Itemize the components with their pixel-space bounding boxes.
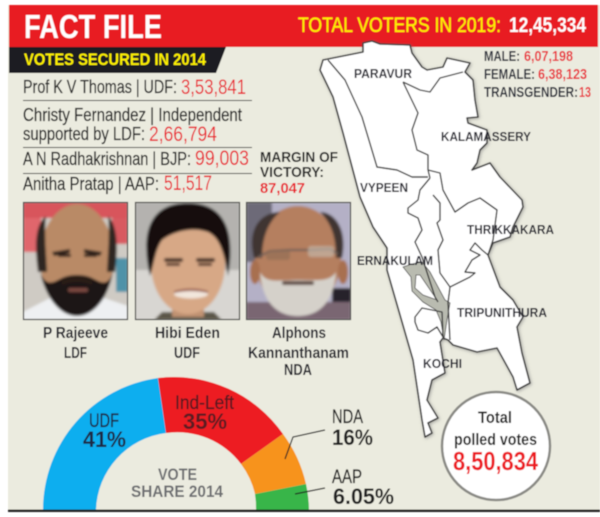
voter breakdown (484, 49, 591, 101)
candidate names: UDF (174, 345, 200, 362)
text block: votes secured list: Christy Fernandez | Independent (23, 105, 242, 125)
map: constituencies: KOCHI (423, 356, 462, 371)
candidate names: Hibi Eden (155, 325, 220, 342)
map outline (320, 41, 530, 437)
candidate names: LDF (64, 345, 87, 362)
voter breakdown: 6,38,123 (538, 67, 587, 83)
photo: Alphons Kannanthanam (246, 202, 351, 320)
leader: AAP (295, 488, 325, 494)
photo: Hibi Eden (135, 202, 240, 320)
callout: total polled votes: polled votes (454, 430, 537, 449)
text block: votes secured list: 2,66,794 (149, 122, 217, 146)
chart: vote share half donut (43, 377, 394, 510)
chart: vote share half donut: 41% (83, 427, 126, 452)
margin of victory: 87,047 (260, 180, 305, 197)
candidate names: Kannanthanam (248, 345, 349, 362)
chart: vote share half donut: 35% (183, 409, 227, 434)
backwater island (415, 275, 437, 300)
segment: NDA (241, 434, 306, 494)
total voters heading: TOTAL VOTERS IN 2019: (298, 13, 501, 37)
backwater (403, 262, 450, 340)
voter breakdown: FEMALE: (484, 67, 535, 83)
segment: Ind-Left (158, 377, 283, 464)
map labels: PARAVUR (354, 66, 413, 81)
map: constituencies: ERNAKULAM (357, 253, 433, 268)
text block: votes secured list: A N Radhakrishnan | BJP: (23, 149, 191, 169)
leader: NDA (285, 430, 325, 459)
bottom rule (8, 510, 600, 512)
map: constituencies: THRIKKAKARA (467, 222, 555, 237)
voter breakdown: 13 (579, 85, 591, 101)
text block: votes secured list: 99,003 (195, 146, 249, 170)
callout: total polled votes: Total (478, 408, 512, 427)
map: constituencies (320, 41, 555, 437)
voter breakdown: TRANSGENDER: (484, 85, 578, 101)
label: NDA: NDA (332, 407, 363, 428)
map: constituencies: VYPEEN (360, 180, 408, 195)
photo: P Rajeeve (23, 202, 128, 320)
chart: vote share half donut: SHARE 2014 (131, 482, 223, 501)
voter breakdown: 6,07,198 (524, 49, 573, 65)
candidate names: P Rajeeve (43, 325, 108, 342)
text block: votes secured list: 51,517 (164, 171, 212, 195)
candidate names: NDA (284, 362, 312, 379)
label: Ind-Left: Ind-Left (175, 393, 235, 414)
constituency boundaries (328, 60, 497, 340)
callout: total polled votes (442, 392, 550, 500)
text block: votes secured list (23, 75, 252, 195)
voter breakdown: MALE: (484, 49, 520, 65)
callout: total polled votes: 8,50,834 (453, 446, 538, 476)
text block: votes secured list: Anitha Pratap | AAP: (23, 174, 159, 194)
map: constituencies: TRIPUNITHURA (457, 305, 548, 320)
header band (9, 5, 598, 47)
candidate names (43, 325, 349, 379)
photo frame (136, 202, 240, 320)
total voters number: 12,45,334 (509, 14, 586, 37)
photo frame (246, 202, 350, 320)
label: UDF: UDF (89, 411, 119, 432)
ribbon: votes secured heading (9, 47, 226, 73)
label: AAP: AAP (332, 467, 362, 488)
ribbon: votes secured heading: VOTES SECURED IN 2014 (24, 50, 206, 69)
text block: votes secured list: supported by LDF: (23, 124, 145, 144)
chart: vote share half donut: 6.05% (333, 484, 394, 509)
text block: votes secured list: Prof K V Thomas | UDF: (23, 77, 177, 97)
text block: votes secured list: 3,53,841 (181, 75, 246, 99)
margin of victory: VICTORY: (260, 164, 324, 181)
segment: AAP (255, 484, 309, 510)
map: constituencies: KALAMASSERY (441, 129, 531, 144)
title: FACT FILE (24, 8, 162, 45)
margin of victory: MARGIN OF (260, 149, 338, 166)
chart: vote share half donut: 16% (332, 425, 373, 450)
margin of victory (260, 149, 338, 197)
candidate names: Alphons (272, 325, 326, 342)
photo frame (24, 202, 128, 320)
segment: UDF (43, 378, 166, 510)
label: centre: VOTE (158, 465, 197, 484)
